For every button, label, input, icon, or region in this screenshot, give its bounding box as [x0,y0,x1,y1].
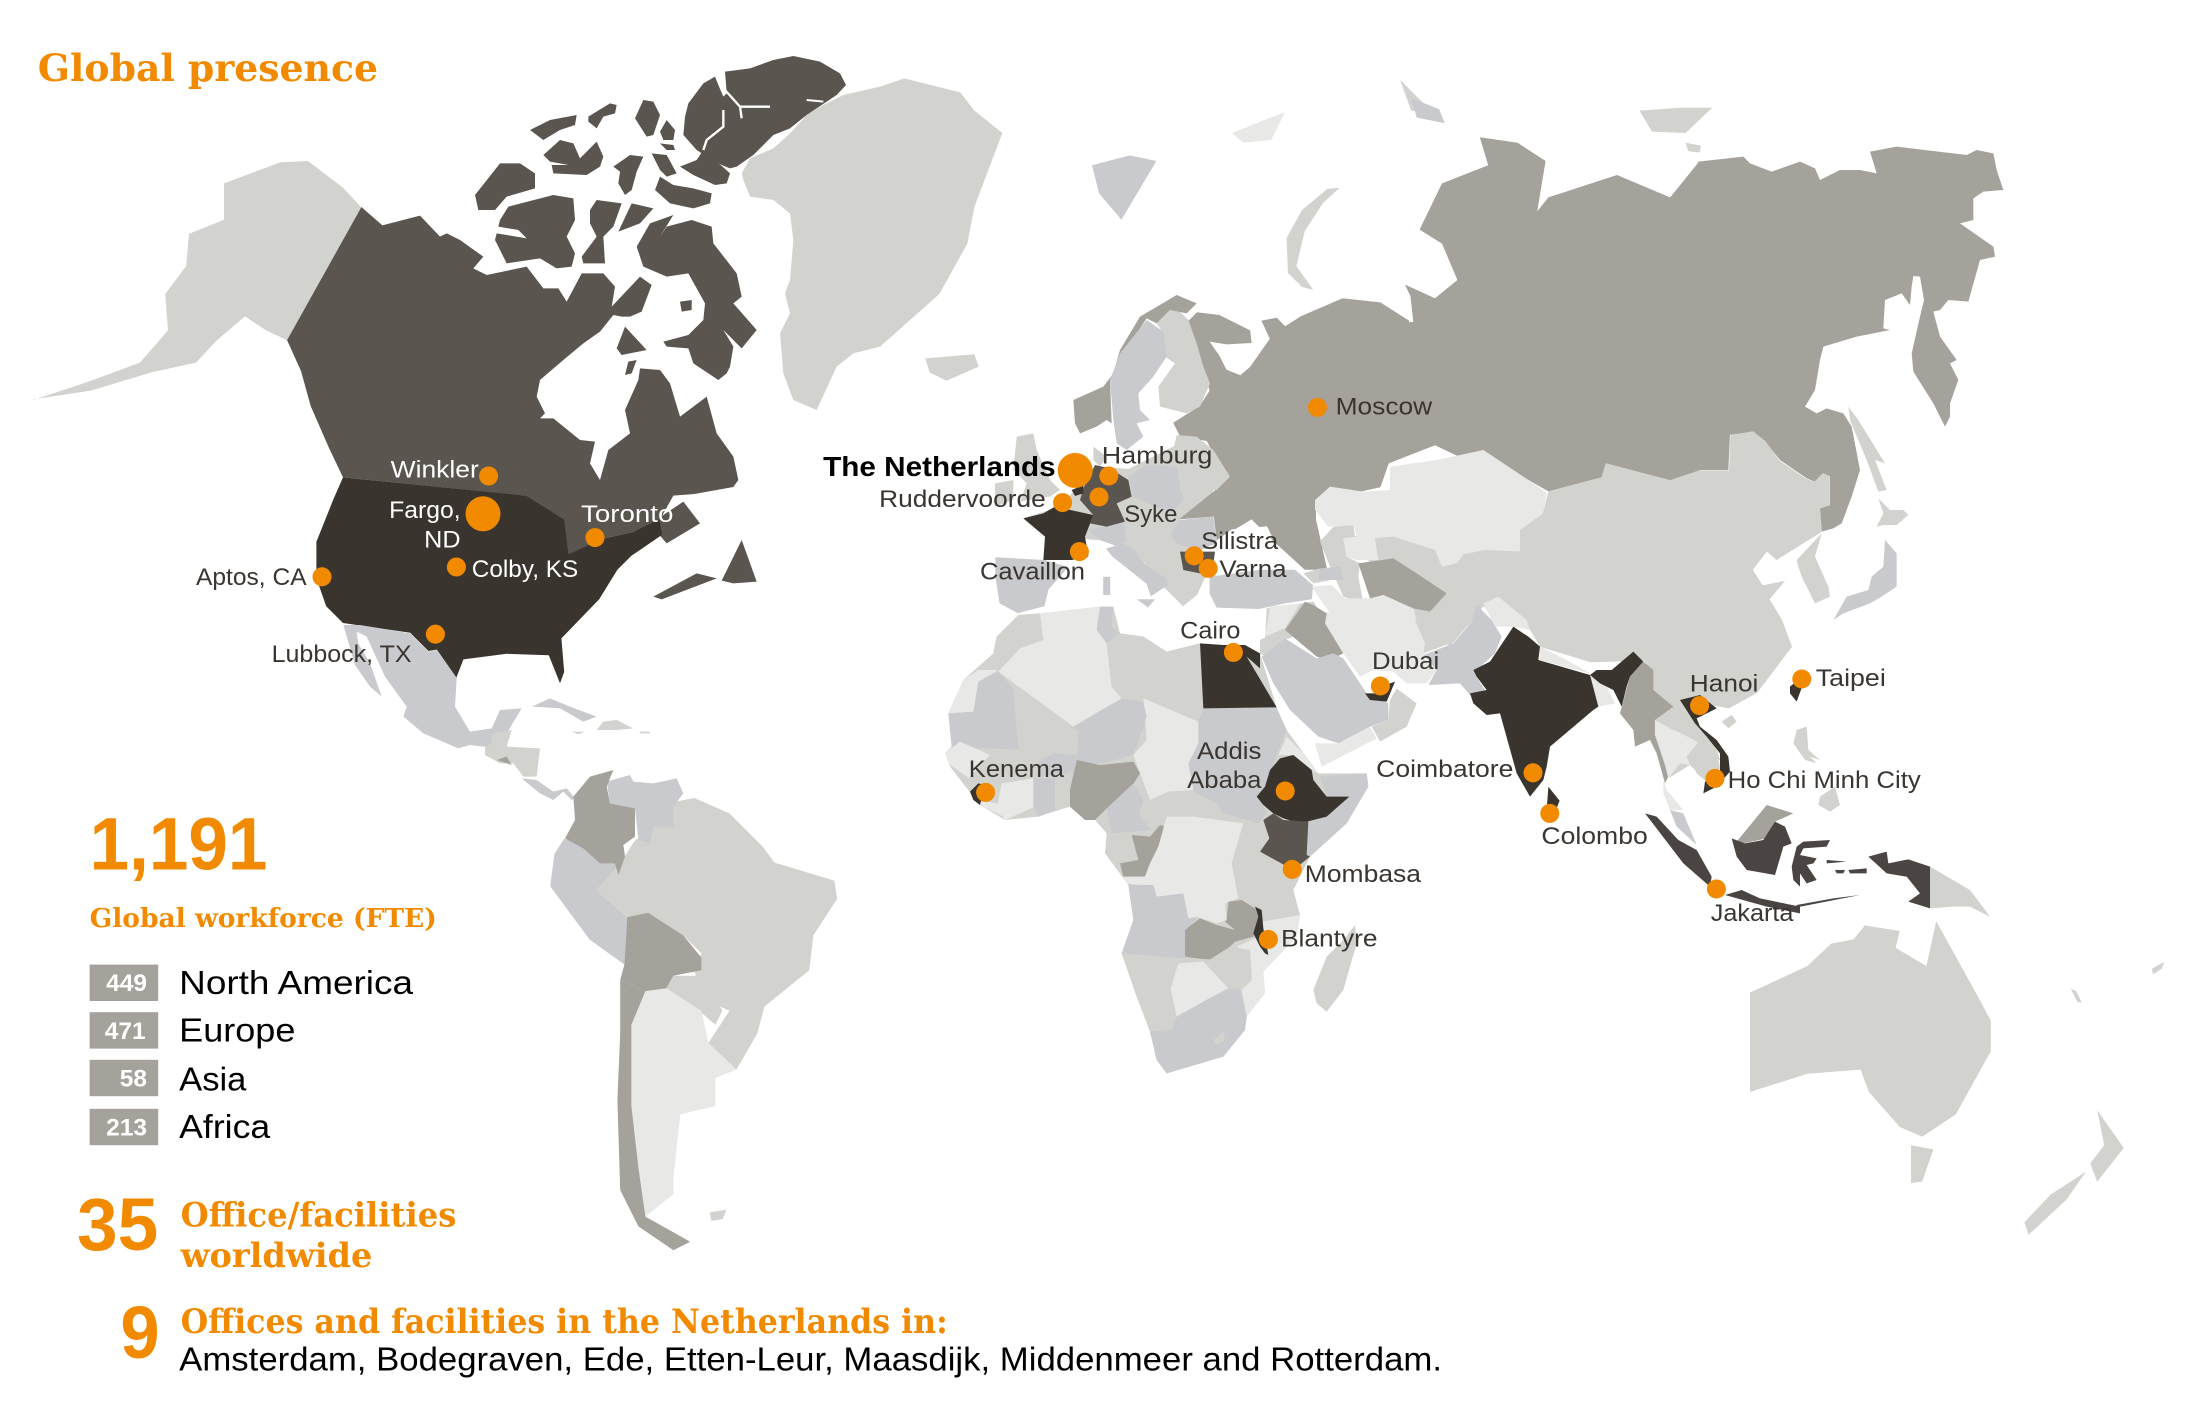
region: Russia [1092,80,2003,570]
region: Mexico, Central America and Caribbean [343,625,650,800]
marker: Syke: Syke [1124,501,1177,528]
stat: offices in the Netherlands: Amsterdam, Bodegraven, Ede, Etten-Leur, Maasdijk, Middenmeer and Rotterdam. [179,1342,1442,1379]
marker: Cavaillon: Cavaillon [980,559,1085,586]
marker: Cairo: Cairo [1180,617,1240,644]
row: North America: 449 [106,970,147,997]
marker: Silistra [1185,528,1279,565]
marker: Coimbatore: Coimbatore [1376,756,1513,783]
country: Sri Lanka [1547,787,1560,808]
marker: Fargo, ND [389,496,500,553]
region: Alaska [28,161,361,402]
region: South America [550,770,837,1250]
region: Middle East [1260,602,1417,767]
row: Asia [90,1060,247,1099]
country: Ethiopia [1257,755,1349,823]
marker: Blantyre: Blantyre [1281,925,1378,952]
marker: Taipei: Taipei [1816,665,1886,692]
marker: Mombasa: Mombasa [1305,861,1421,888]
marker: Fargo, ND: ND [424,526,461,553]
country: Indonesia [1645,813,1930,918]
row: Europe [90,1012,295,1050]
country: Taiwan [1790,678,1803,702]
country: UAE [1365,682,1395,702]
stat: offices in the Netherlands: Offices and facilities in the Netherlands in: [181,1301,948,1341]
region: Central and East Asia [1210,407,1908,708]
stat: offices worldwide: Office/facilities [181,1194,456,1234]
country: Bulgaria [1180,552,1215,573]
marker: Kenema [969,756,1064,802]
country: Egypt [1200,643,1277,708]
row: Europe: Europe [179,1013,295,1050]
region: Canada [287,56,846,599]
stat: offices in the Netherlands [120,1291,1442,1379]
row: Africa: Africa [179,1109,271,1146]
marker: Addis Ababa: Ababa [1187,767,1262,794]
marker: Varna: Varna [1219,556,1287,583]
marker: Ruddervoorde: Ruddervoorde [879,486,1046,513]
marker: Fargo, ND: Fargo, [389,497,461,524]
marker: Taipei [1792,665,1886,692]
country: Netherlands [1072,485,1083,496]
marker: Ho Chi Minh City: Ho Chi Minh City [1728,767,1922,794]
row: Africa [90,1109,271,1146]
stat: offices worldwide: 35 [77,1183,158,1266]
stat: offices worldwide: worldwide [180,1235,372,1275]
marker: Hamburg: Hamburg [1102,442,1212,469]
marker: Jakarta: Jakarta [1711,900,1794,927]
marker: Silistra: Silistra [1201,528,1279,555]
marker: Syke [1089,487,1177,528]
region: South-East Asia [1620,662,1990,918]
stat: global workforce: Global workforce (FTE) [90,903,437,934]
title: Global presence [38,46,378,90]
marker: The Netherlands: The Netherlands [823,451,1056,482]
marker: Winkler: Winkler [391,456,479,483]
marker: The Netherlands [823,451,1093,488]
marker: Lubbock, TX: Lubbock, TX [272,641,412,668]
row: North America: North America [179,965,413,1002]
marker: Addis Ababa: Addis [1197,738,1261,765]
region: Africa [945,607,1368,1073]
office markers and labels [196,393,1922,952]
region: Greenland and Iceland [742,78,1002,410]
country: Kenya [1260,813,1310,870]
region: United States [316,477,662,683]
country: Germany [1080,465,1132,527]
stat: offices in the Netherlands: 9 [120,1291,160,1374]
marker: Hanoi [1690,671,1758,715]
marker: Colombo: Colombo [1541,823,1648,850]
marker: Jakarta [1707,879,1794,927]
marker: Toronto [581,501,673,547]
row: Europe: 471 [105,1018,146,1045]
legend: workforce by region [90,965,413,1146]
region: Oceania [1750,921,2164,1235]
stat: global workforce: 1,191 [90,802,267,885]
marker: Cavaillon [980,542,1089,586]
country: France [1023,507,1093,560]
marker: Hanoi: Hanoi [1690,671,1758,698]
marker: Kenema: Kenema [969,756,1064,783]
country: India north-east [1590,652,1643,707]
marker: Aptos, CA: Aptos, CA [196,564,307,591]
marker: Hamburg [1099,442,1212,486]
region: South Asia [1470,597,1643,797]
marker: Addis Ababa [1187,738,1295,801]
marker: Moscow: Moscow [1336,393,1433,420]
marker: Dubai: Dubai [1372,648,1439,675]
row: Africa: 213 [106,1114,147,1141]
marker: Dubai [1371,648,1439,696]
country: Sierra Leone [970,783,985,805]
country: Vietnam [1680,695,1730,793]
row: North America [90,965,413,1002]
country: Malawi [1253,907,1268,955]
marker: Lubbock, TX [272,625,445,668]
row: Asia: 58 [120,1065,147,1092]
marker: Colombo [1540,804,1648,850]
country: India [1470,627,1598,797]
stat: offices worldwide [77,1183,456,1275]
stat: global workforce [90,802,437,934]
marker: Cairo [1180,617,1243,662]
row: Asia: Asia [179,1062,247,1099]
marker: Colby, KS: Colby, KS [472,556,578,583]
region: Europe [995,295,1295,613]
marker: Toronto: Toronto [581,501,673,528]
